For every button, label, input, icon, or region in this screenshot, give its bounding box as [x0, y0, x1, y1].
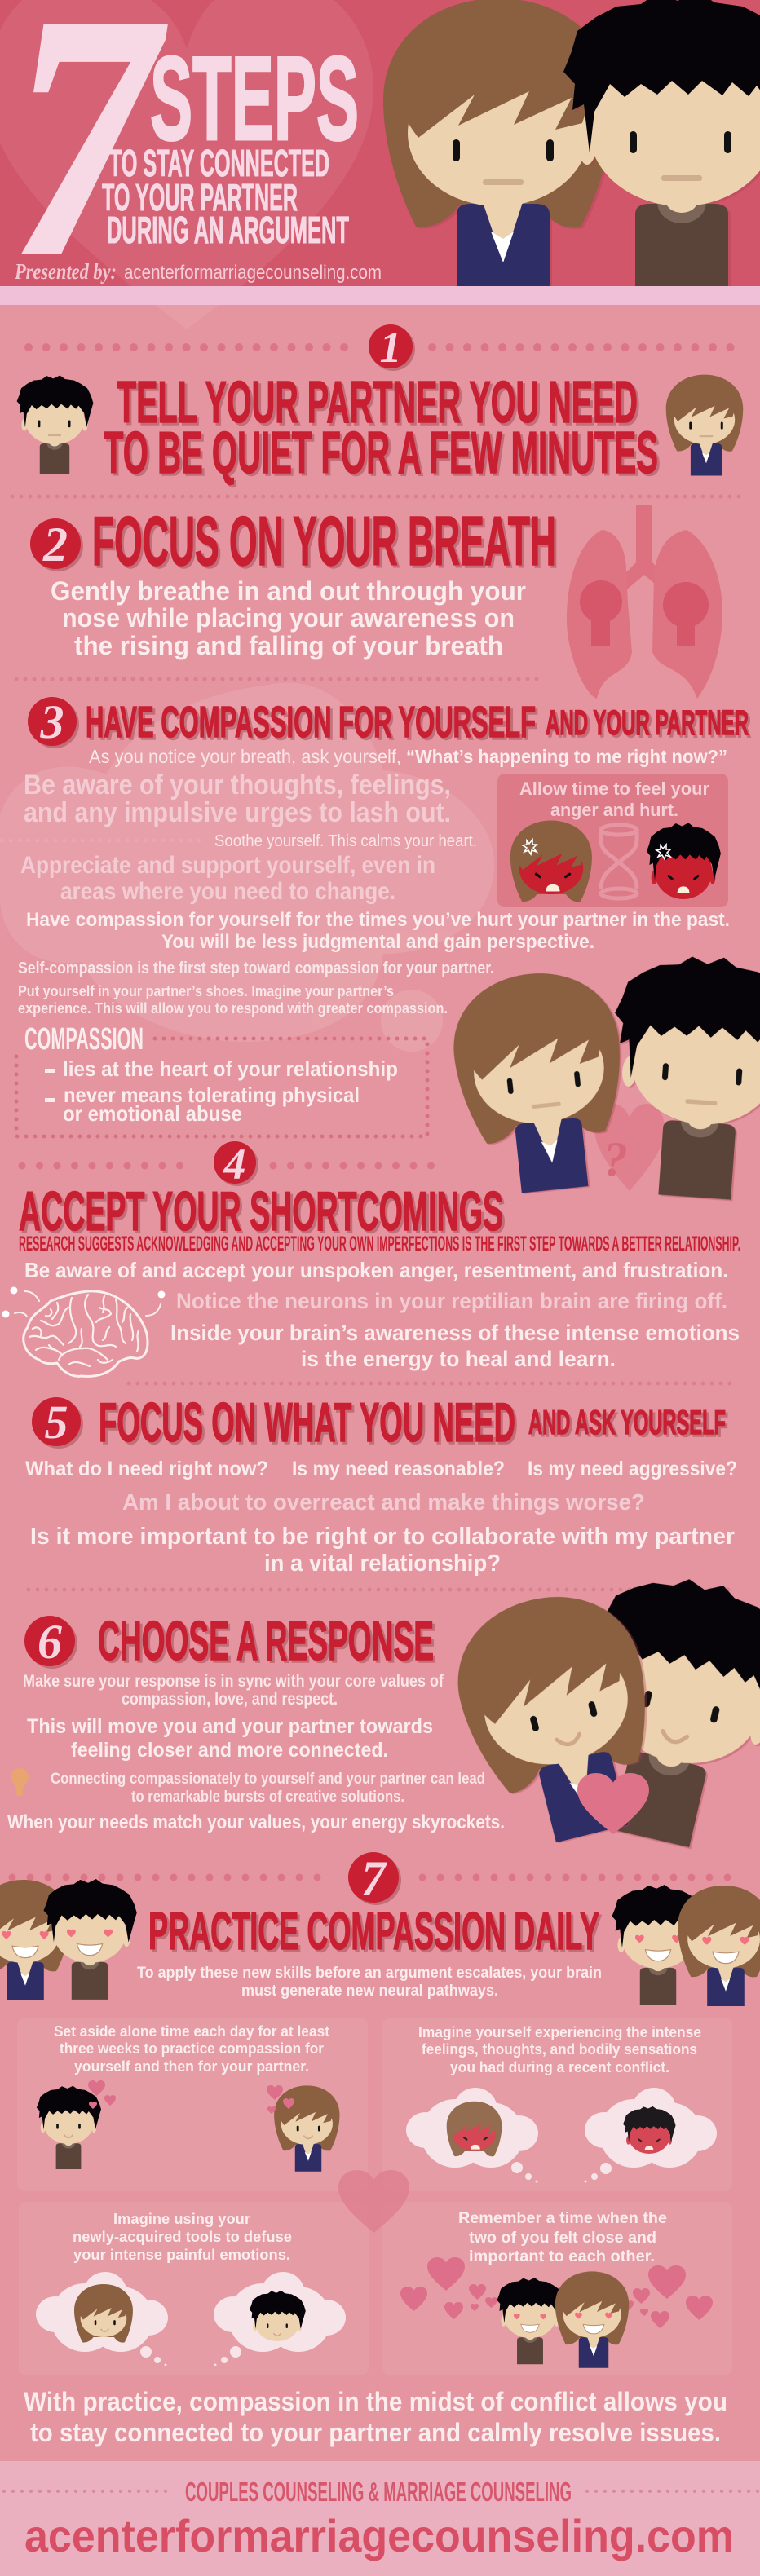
text: needs match: When your needs match your values, your energy skyrockets. — [7, 1811, 505, 1833]
panel: imagine experiencing — [382, 2018, 732, 2191]
intro step 7 — [137, 1965, 602, 2000]
questions step 5: Is my need aggressive? — [528, 1458, 737, 1480]
text: be aware: Be aware of your thoughts, feelings, — [24, 770, 451, 801]
panel: alone time: yourself and then for your partner. — [74, 2058, 309, 2075]
icon: hourglass — [601, 825, 637, 898]
header heart — [0, 0, 373, 329]
step 1 number divider — [29, 323, 738, 372]
subtitle: TO STAY CONNECTED — [109, 142, 329, 184]
step 5 badge: 5 — [44, 1396, 68, 1449]
text: inside brain: is the energy to heal and learn. — [301, 1347, 616, 1371]
step 1 badge: 1 — [380, 323, 401, 372]
compassion heading: COMPASSION — [24, 1022, 144, 1056]
text: have compassion: You will be less judgmental and gain perspective. — [161, 931, 594, 953]
text: notice your breath: “What’s happening to me right now?” — [406, 746, 727, 767]
text: be aware — [24, 770, 451, 828]
couple — [497, 2271, 629, 2368]
angry woman — [510, 820, 592, 902]
text: move: feeling closer and more connected. — [71, 1739, 388, 1762]
text step 2 — [51, 576, 526, 660]
text: notice your breath: As you notice your breath, ask yourself, — [89, 746, 401, 767]
panel: alone time: Set aside alone time each day for at least — [54, 2022, 329, 2040]
panel: compassion box — [16, 1022, 427, 1136]
band — [0, 286, 760, 305]
panel: remember a time — [382, 2202, 732, 2375]
text step 6: Make sure your response is in sync with your core values of — [23, 1672, 444, 1691]
text: overreact: Am I about to overreact and make things worse? — [122, 1489, 645, 1515]
intro step 7: To apply these new skills before an argument escalates, your brain — [137, 1965, 602, 1982]
text step 2: the rising and falling of your breath — [74, 631, 503, 660]
couple right step 7 — [612, 1885, 760, 2006]
closing statement: With practice, compassion in the midst of conflict allows you — [24, 2387, 727, 2416]
thought cloud woman calm — [36, 2272, 168, 2366]
woman step 1 — [666, 375, 743, 476]
panel: remember a time: important to each other. — [469, 2247, 655, 2265]
panel: remember a time: Remember a time when the — [458, 2209, 667, 2227]
text: inside brain — [170, 1321, 740, 1371]
icon: brain — [2, 1286, 165, 1376]
step 7 badge: 7 — [361, 1851, 387, 1905]
text: more important — [30, 1524, 735, 1577]
text: have compassion: Have compassion for yourself for the times you’ve hurt your partner in the past. — [26, 909, 730, 931]
text step 6 — [23, 1672, 444, 1709]
question heart — [594, 1104, 665, 1191]
step 6 badge: 6 — [38, 1615, 62, 1669]
icon: lungs — [567, 505, 722, 699]
panel: imagine using tools — [19, 2202, 369, 2375]
compassion bullets: never means tolerating physical — [64, 1083, 360, 1107]
couple left step 7 — [0, 1879, 137, 2000]
text step 2: nose while placing your awareness on — [62, 603, 515, 633]
text: self-compassion: Self-compassion is the first step toward compassion for your partner. — [18, 959, 494, 977]
illustration: header couple — [383, 0, 760, 300]
text: connecting — [51, 1771, 485, 1806]
panel: imagine using tools: Imagine using your — [113, 2210, 250, 2227]
text: self-compassion: experience. This will allow you to respond with greater compassion. — [18, 1000, 448, 1017]
panel: imagine using tools: newly-acquired tools to defuse — [73, 2228, 292, 2245]
text: self-compassion — [18, 959, 494, 1017]
compassion bullets: or emotional abuse — [63, 1101, 242, 1126]
step 5 badge — [32, 1396, 81, 1449]
text: appreciate: Appreciate and support yourself, even in — [20, 852, 435, 879]
text: allow time: anger and hurt. — [550, 800, 678, 820]
step 7 divider — [12, 1851, 730, 1905]
text step 6: compassion, love, and respect. — [122, 1690, 338, 1709]
panel: remember a time: two of you felt close and — [469, 2229, 656, 2247]
text: more important: Is it more important to be right or to collaborate with my partner — [30, 1524, 735, 1550]
step 3 badge — [28, 695, 77, 748]
hearts — [400, 2257, 713, 2328]
step 2 badge — [30, 518, 81, 571]
step 4 divider — [22, 1140, 444, 1189]
text: move — [27, 1715, 433, 1762]
illustration: couple step 3 — [447, 951, 760, 1204]
step 2 badge: 2 — [42, 518, 68, 571]
questions step 5 — [25, 1458, 737, 1480]
text: move: This will move you and your partner towards — [27, 1715, 433, 1738]
compassion bullets: lies at the heart of your relationship — [63, 1056, 398, 1081]
step 3 badge: 3 — [39, 695, 64, 748]
step 4 badge: 4 — [223, 1140, 246, 1189]
subtitle: DURING AN ARGUMENT — [107, 209, 349, 251]
presented by: Presented by: — [14, 259, 117, 284]
thought cloud man calm — [214, 2272, 346, 2366]
panel: allow time — [497, 774, 728, 907]
thought cloud man angry — [584, 2088, 717, 2183]
icon: lightbulb — [11, 1768, 29, 1796]
panel: alone time: three weeks to practice compassion for — [60, 2040, 324, 2057]
text step 2: Gently breathe in and out through your — [51, 576, 526, 606]
text: connecting: to remarkable bursts of creative solutions. — [131, 1789, 404, 1806]
closing statement: to stay connected to your partner and calmly resolve issues. — [30, 2418, 721, 2447]
question heart: ? — [603, 1132, 628, 1186]
heading step 6: CHOOSE A RESPONSE — [98, 1610, 434, 1672]
step 1 badge — [369, 323, 413, 372]
subtitle: TO YOUR PARTNER — [102, 176, 298, 218]
text: soothe: Soothe yourself. This calms your heart. — [214, 832, 477, 850]
closing statement — [24, 2387, 727, 2447]
background cloud — [0, 683, 494, 1052]
angry man — [647, 823, 721, 899]
text: notice neurons: Notice the neurons in your reptilian brain are firing off. — [176, 1289, 727, 1313]
subtitle — [102, 142, 349, 251]
text: connecting: Connecting compassionately to yourself and your partner can lead — [51, 1771, 485, 1788]
panel: imagine experiencing: you had during a recent conflict. — [450, 2058, 669, 2075]
center heart — [338, 2170, 409, 2233]
compassion bullets — [45, 1056, 398, 1126]
panel: imagine experiencing: feelings, thoughts, and bodily sensations — [422, 2040, 697, 2058]
text: notice your breath — [89, 746, 727, 767]
title: STEPS: STEPS — [150, 32, 359, 165]
step 4 badge — [214, 1140, 256, 1189]
text: have compassion — [26, 909, 730, 953]
panel: imagine using tools: your intense painful emotions. — [73, 2246, 290, 2263]
presented by — [14, 259, 382, 284]
presented by: acenterformarriagecounseling.com — [124, 262, 382, 284]
step 6 badge — [24, 1615, 75, 1669]
thought cloud woman angry — [406, 2088, 538, 2183]
questions step 5: Is my need reasonable? — [292, 1458, 505, 1480]
text: be aware: and any impulsive urges to lash out. — [24, 797, 451, 828]
text: self-compassion: Put yourself in your partner’s shoes. Imagine your partner’s — [18, 983, 394, 999]
intro step 7: must generate new neural pathways. — [241, 1983, 498, 2000]
illustration: couple step 6 — [441, 1560, 760, 1862]
heart step 6 — [577, 1773, 649, 1834]
text: allow time: Allow time to feel your — [519, 779, 709, 799]
panel: imagine experiencing: Imagine yourself experiencing the intense — [418, 2023, 701, 2040]
heading step 1 — [104, 370, 658, 486]
text: appreciate: areas where you need to change. — [60, 878, 395, 905]
text: allow time — [519, 779, 709, 820]
step 7 badge — [348, 1851, 399, 1905]
text: inside brain: Inside your brain’s awareness of these intense emotions — [170, 1321, 740, 1345]
questions step 5: What do I need right now? — [25, 1458, 268, 1480]
text step 4: Be aware of and accept your unspoken anger, resentment, and frustration. — [24, 1258, 728, 1282]
panel: alone time — [17, 2018, 368, 2191]
panel: header banner — [0, 0, 760, 329]
text: more important: in a vital relationship? — [264, 1550, 501, 1577]
text: appreciate — [20, 852, 435, 905]
man step 1 — [17, 376, 93, 474]
panel: footer — [0, 2461, 760, 2576]
